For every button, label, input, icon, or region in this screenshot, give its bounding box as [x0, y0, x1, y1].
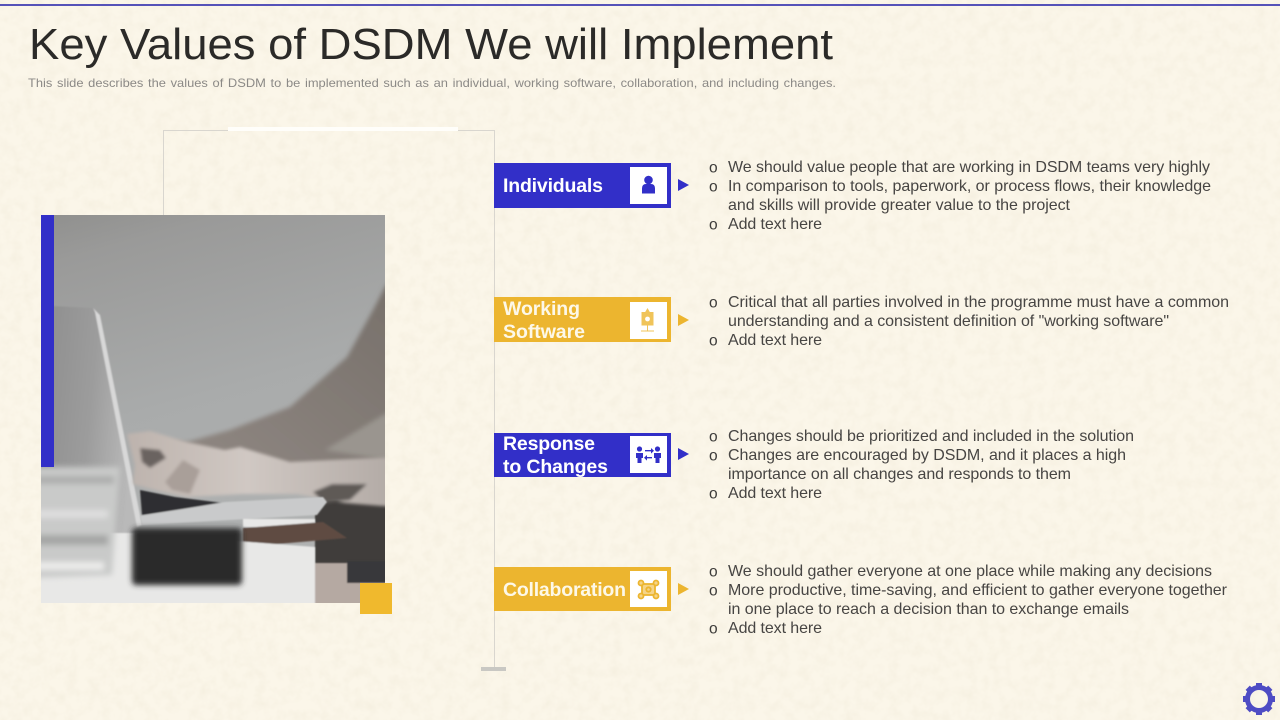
bullet text: o: [709, 448, 718, 464]
arrow: [678, 314, 689, 326]
bullet text: [709, 428, 1134, 502]
item: Working Software: [494, 294, 1229, 350]
item: Individuals: [494, 159, 1211, 234]
arrow: [678, 448, 689, 460]
label text: Collaboration: [503, 579, 626, 601]
bullet text: understanding and a consistent definition of "working software": [728, 313, 1169, 330]
bullet text: Add text here: [728, 216, 822, 233]
icon: collaboration: [630, 571, 667, 607]
bullet text: importance on all changes and responds to them: [728, 466, 1071, 483]
item: Working Software: Software: [503, 321, 585, 343]
bullet text: o: [709, 160, 718, 176]
connector frame: [164, 127, 506, 671]
bullet text: o: [709, 294, 718, 312]
icon: settings gear: [1243, 683, 1275, 715]
bullet text: [709, 294, 1229, 350]
label box: [494, 567, 671, 611]
bullet text: and skills will provide greater value to the project: [728, 197, 1071, 214]
bullet text: Add text here: [728, 332, 822, 349]
icon: people exchanging: [630, 436, 667, 473]
bullet text: o: [709, 582, 718, 600]
bullet text: We should value people that are working in DSDM teams very highly: [728, 159, 1210, 176]
bullet text: o: [709, 428, 718, 446]
bullet text: o: [709, 178, 718, 196]
bullet text: o: [709, 486, 718, 502]
title: Key Values of DSDM We will Implement: [29, 20, 833, 69]
bullet text: in one place to reach a decision than to exchange emails: [728, 601, 1129, 618]
bullet text: Changes are encouraged by DSDM, and it places a high: [728, 447, 1126, 464]
bullet text: o: [709, 216, 718, 234]
photo blue accent bar: [41, 215, 54, 467]
bullet text: o: [709, 332, 718, 350]
label text: Response: [503, 433, 595, 455]
label text: Individuals: [503, 175, 603, 197]
bullet text: More productive, time-saving, and efficient to gather everyone together: [728, 582, 1228, 599]
bullet text: We should gather everyone at one place while making any decisions: [728, 563, 1212, 580]
icon: software: [630, 302, 667, 339]
label box: [494, 433, 671, 477]
photo yellow accent square: [360, 583, 392, 614]
top accent line: [0, 4, 1280, 6]
photo: hands typing on a laptop: [41, 215, 385, 603]
bullet text: Add text here: [728, 485, 822, 502]
bullet text: o: [709, 564, 718, 580]
bullet text: Add text here: [728, 620, 822, 637]
label text: Working: [503, 298, 580, 320]
item: Response to Changes: to Changes: [503, 456, 608, 478]
item: Response to Changes: [494, 428, 1134, 502]
bullet text: In comparison to tools, paperwork, or process flows, their knowledge: [728, 178, 1211, 195]
subtitle: This slide describes the values of DSDM to be implemented such as an individual, working software, collaboration, and including changes.: [28, 76, 836, 90]
label box: [494, 163, 671, 208]
bullet text: [709, 159, 1211, 234]
bullet text: [709, 563, 1228, 638]
item: Collaboration: [494, 563, 1228, 638]
bullet text: Changes should be prioritized and included in the solution: [728, 428, 1134, 445]
label box: [494, 297, 671, 342]
bullet text: o: [709, 620, 718, 638]
arrow: [678, 179, 689, 191]
arrow: [678, 583, 689, 595]
icon: person: [630, 167, 667, 204]
bullet text: Critical that all parties involved in the programme must have a common: [728, 294, 1229, 311]
